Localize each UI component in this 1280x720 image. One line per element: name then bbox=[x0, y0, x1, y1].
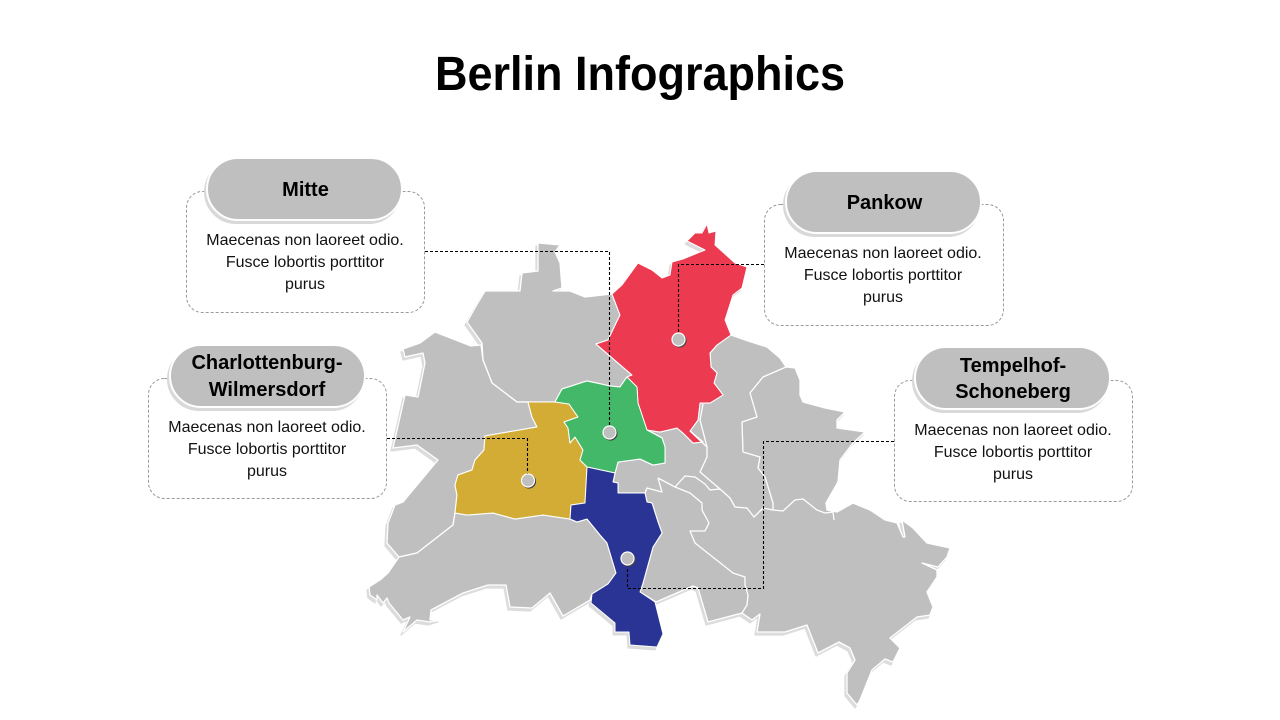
district: south-west bbox=[369, 513, 616, 632]
district: east and centre bbox=[613, 335, 950, 705]
district: Mitte bbox=[555, 377, 665, 473]
body text: Maecenas non laoreet odio. bbox=[784, 245, 982, 262]
marker: Pankow bbox=[672, 333, 685, 346]
title: Berlin Infographics bbox=[435, 48, 845, 101]
pill heading bbox=[786, 171, 981, 233]
body text: purus bbox=[285, 276, 325, 293]
pill heading bbox=[915, 347, 1110, 409]
pill heading: Wilmersdorf bbox=[209, 379, 326, 401]
district: Charlottenburg-Wilmersdorf bbox=[455, 402, 587, 519]
district: Pankow bbox=[596, 224, 747, 443]
connector: Pankow bbox=[678, 264, 764, 339]
marker: Charlottenburg-Wilmersdorf bbox=[522, 474, 534, 487]
callout box bbox=[894, 380, 1132, 502]
body text: Fusce lobortis porttitor bbox=[188, 441, 347, 458]
pill heading bbox=[170, 345, 365, 407]
body text: purus bbox=[993, 466, 1033, 483]
callout box bbox=[186, 192, 424, 312]
callout: Mitte bbox=[186, 158, 424, 312]
body text: Maecenas non laoreet odio. bbox=[168, 419, 366, 436]
pill heading: Pankow bbox=[847, 192, 923, 214]
callout: Charlottenburg-Wilmersdorf bbox=[148, 345, 386, 498]
callout: Tempelhof-Schoneberg bbox=[894, 347, 1132, 502]
callout box bbox=[764, 204, 1004, 326]
pill heading: Mitte bbox=[282, 179, 329, 201]
connector: Charlottenburg-Wilmersdorf bbox=[387, 438, 528, 480]
body text: Maecenas non laoreet odio. bbox=[206, 232, 404, 249]
body text: Fusce lobortis porttitor bbox=[934, 444, 1093, 461]
connector: Mitte bbox=[425, 252, 610, 432]
district: north-west bbox=[467, 243, 632, 402]
map of Berlin bbox=[369, 224, 950, 705]
district: west bbox=[387, 332, 537, 557]
callout: Pankow bbox=[764, 171, 1004, 326]
callout box bbox=[148, 378, 386, 498]
pill heading bbox=[207, 158, 402, 220]
body text: Fusce lobortis porttitor bbox=[804, 267, 963, 284]
pill heading: Tempelhof- bbox=[960, 355, 1066, 377]
body text: Fusce lobortis porttitor bbox=[226, 254, 385, 271]
body text: purus bbox=[863, 289, 903, 306]
pill heading: Charlottenburg- bbox=[191, 352, 343, 374]
marker: Tempelhof-Schoneberg bbox=[621, 552, 634, 565]
body text: Maecenas non laoreet odio. bbox=[914, 422, 1112, 439]
marker: Mitte bbox=[603, 426, 616, 439]
internal district borders bbox=[645, 367, 834, 613]
pill heading: Schoneberg bbox=[955, 381, 1071, 403]
body text: purus bbox=[247, 463, 287, 480]
district: Tempelhof-Schoneberg bbox=[570, 467, 663, 647]
connector: Tempelhof-Schoneberg bbox=[628, 442, 894, 588]
